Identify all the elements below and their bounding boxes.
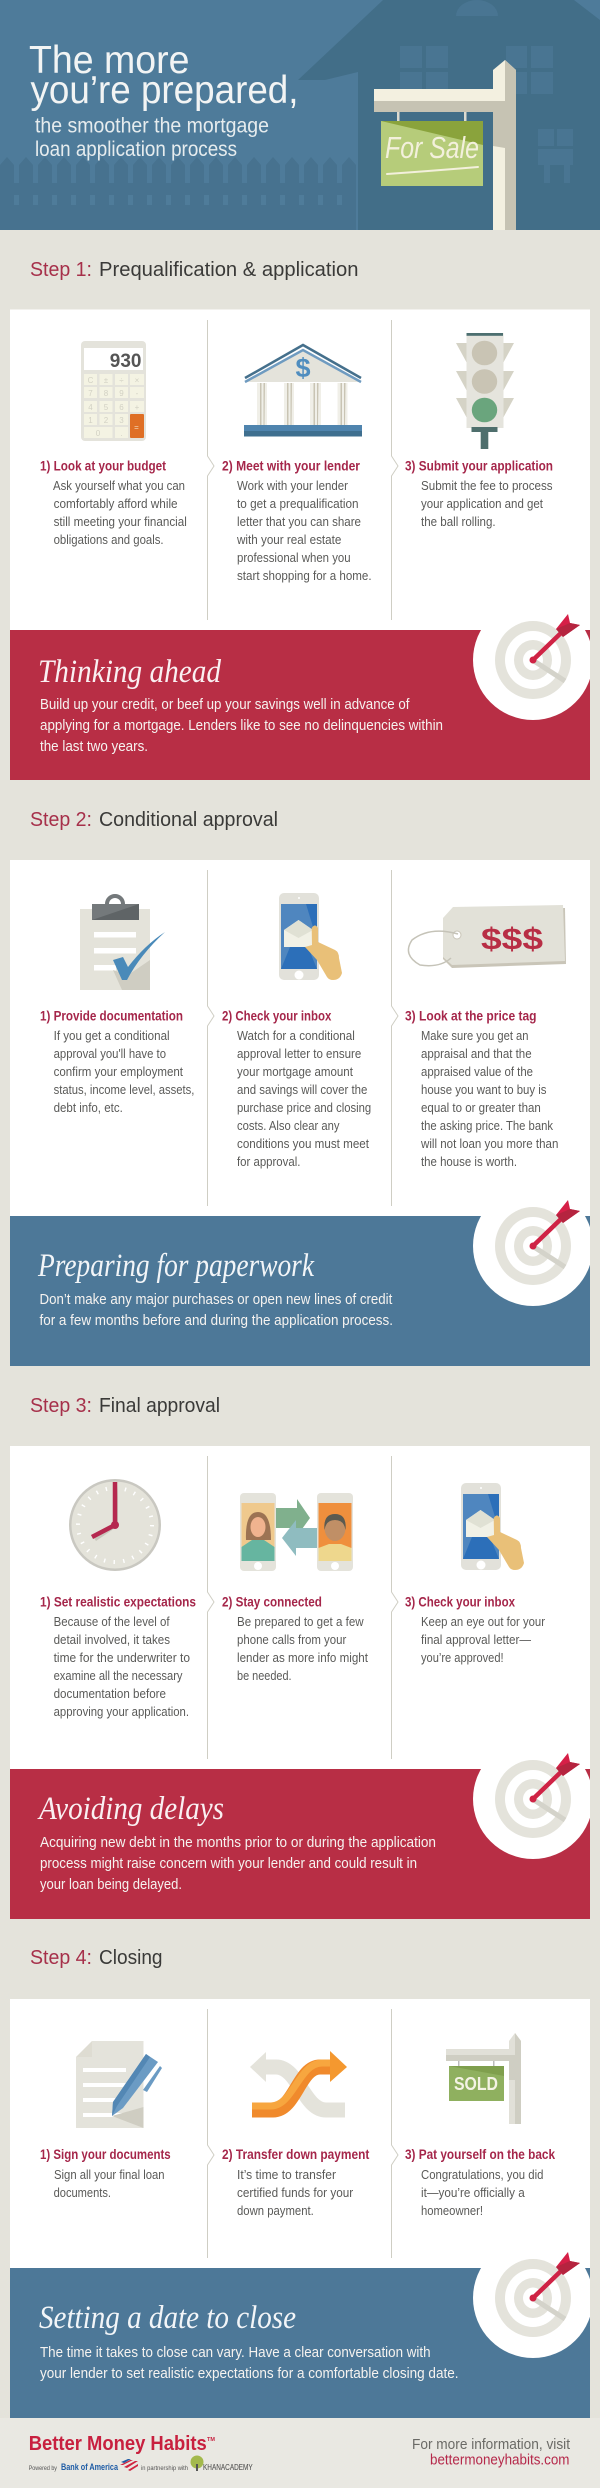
icon: price tag [408,905,566,968]
column 3: pat yourself on the back: 3) Pat yourself on the back [405,2147,555,2162]
column 2: transfer down payment: down payment. [237,2203,314,2218]
icon: phone with envelope [279,893,342,980]
icon: bank [244,345,362,436]
callout text: the last two years. [40,739,148,755]
icon: calculator [81,341,146,441]
callout heading: Preparing for paperwork [37,1248,315,1284]
column 3: submit your application: Submit the fee to process [421,478,553,493]
column 1: sign your documents [40,2147,171,2200]
icon: calculator: C [88,376,94,385]
sponsor logos: in partnership with [141,2465,188,2472]
heading: step 4: Closing [99,1947,162,1969]
icon: clock [69,1479,161,1571]
column 3: check your inbox: you’re approved! [421,1650,504,1665]
column 2: check your inbox: your mortgage amount [237,1064,353,1079]
callout text: your loan being delayed. [40,1877,182,1893]
column 3: pat yourself on the back: Congratulations, you did [421,2167,543,2182]
column 2: stay connected: be needed. [237,1668,292,1683]
column 2: stay connected [222,1594,368,1683]
column 3: pat yourself on the back: it—you’re officially a [421,2185,525,2200]
icon: calculator: 6 [119,403,124,412]
icon: calculator: 4 [88,403,93,412]
icon: calculator: ÷ [119,376,124,385]
column 2: check your inbox [222,1008,371,1169]
column 1: provide documentation: confirm your employment [54,1064,183,1079]
callout: setting a date to close [10,2238,593,2418]
column 1: provide documentation: status, income level, assets, [54,1082,194,1097]
column 3: look at the price tag: will not loan you more than [420,1136,558,1151]
column 2: transfer down payment: 2) Transfer down payment [222,2147,370,2162]
column 2: transfer down payment: certified funds for your [237,2185,354,2200]
panel: step 1 [10,310,590,630]
column 1: look at your budget [40,458,187,547]
column 1: sign your documents: Sign all your final loan [54,2167,165,2182]
column 2: transfer down payment [222,2147,370,2218]
column 3: check your inbox: Keep an eye out for your [421,1614,546,1629]
column 1: set realistic expectations [40,1594,196,1719]
title [29,39,298,112]
column 1: look at your budget: Ask yourself what you can [53,478,185,493]
column 3: check your inbox: final approval letter— [421,1632,531,1647]
icon: sold sign: SOLD [454,2074,498,2094]
column 1: set realistic expectations: 1) Set realistic expectations [40,1594,196,1610]
logo: better money habits: TM [207,2437,215,2443]
subtitle [35,114,269,161]
panel: step 2 [10,860,590,1216]
heading: step 2: Step 2: [30,809,92,831]
column 2: transfer down payment: It’s time to transfer [237,2167,337,2182]
icon: target [473,1186,593,1306]
callout text: The time it takes to close can vary. Have a clear conversation with [40,2345,430,2361]
column 2: meet with your lender: professional when you [237,550,351,565]
callout text [40,2345,458,2382]
column 3: look at the price tag: 3) Look at the price tag [405,1008,536,1024]
more information link: bettermoneyhabits.com [430,2452,570,2468]
panel: step 3 [10,1446,590,1769]
column 1: set realistic expectations: detail involved, it takes [54,1632,170,1647]
column 1: set realistic expectations: approving your application. [54,1704,189,1719]
callout text: applying for a mortgage. Lenders like to see no delinquencies within [40,718,443,734]
icon: calculator: ± [104,376,109,385]
icon: traffic light [456,333,514,449]
column 1: set realistic expectations: Because of the level of [54,1614,170,1629]
icon: calculator: + [135,403,140,412]
callout text: Don’t make any major purchases or open new lines of credit [40,1292,392,1308]
icon: target [473,2238,593,2358]
icon: for sale sign: For Sale [385,130,479,165]
icon: target [473,600,593,720]
callout text: Build up your credit, or beef up your savings well in advance of [40,697,410,713]
icon: document with pen [76,2041,162,2128]
callout text: your lender to set realistic expectations for a comfortable closing date. [40,2366,458,2382]
column 3: pat yourself on the back: homeowner! [421,2203,483,2218]
icon: clipboard with check [80,896,165,990]
sponsor logos: Bank of America [61,2462,119,2473]
column 2: stay connected: 2) Stay connected [222,1594,322,1610]
heading: step 4 [30,1947,162,1969]
icon: calculator: 5 [104,403,109,412]
title: The more [29,39,190,82]
column 1: look at your budget: 1) Look at your budget [40,458,166,474]
column 3: submit your application: the ball rolling. [421,514,496,529]
column 1: set realistic expectations: examine all the necessary [54,1668,183,1683]
icon: calculator: 0 [96,429,101,438]
column 2: stay connected: phone calls from your [237,1632,347,1647]
column 3: look at the price tag: the asking price. The bank [421,1118,553,1133]
footer [0,2418,600,2488]
column 3: look at the price tag: Make sure you get an [421,1028,528,1043]
column 2: meet with your lender: with your real estate [236,532,341,547]
column 2: check your inbox: and savings will cover the [237,1082,367,1097]
icon: calculator: 7 [88,389,93,398]
callout heading: Thinking ahead [38,654,221,690]
icon: calculator: 2 [104,416,109,425]
column 2: check your inbox: approval letter to ensure [237,1046,361,1061]
column 2: check your inbox: costs. Also clear any [237,1118,340,1133]
callout text [40,1292,393,1329]
column 3: look at the price tag [405,1008,558,1169]
column 1: set realistic expectations: time for the underwriter to [54,1650,190,1665]
heading: step 4: Step 4: [30,1947,92,1969]
column 2: stay connected: lender as more info might [237,1650,368,1665]
column 1: provide documentation: 1) Provide documentation [40,1008,183,1024]
panel: step 4 [10,1999,590,2268]
illustration: picket fence [0,157,356,230]
icon: sold sign [446,2033,521,2124]
icon: calculator: 9 [119,389,124,398]
column 2: check your inbox: 2) Check your inbox [222,1008,332,1024]
column 2: check your inbox: Watch for a conditional [237,1028,355,1043]
column 3: look at the price tag: equal to or greater than [421,1100,541,1115]
callout text: for a few months before and during the application process. [40,1313,393,1329]
column 3: check your inbox: 3) Check your inbox [405,1594,515,1610]
logo: better money habits: Better Money Habits [29,2433,207,2455]
column 3: look at the price tag: appraised value of the [421,1064,533,1079]
icon: crossing arrows [250,2051,347,2110]
sponsor logos: Powered by [29,2465,58,2472]
icon: phones with arrows [240,1493,353,1571]
icon: bank: $ [295,353,311,383]
column 3: look at the price tag: the house is worth. [421,1154,517,1169]
column 2: check your inbox: purchase price and closing [237,1100,371,1115]
icon: target [473,1739,593,1859]
callout text: process might raise concern with your lender and could result in [40,1856,417,1872]
subtitle: the smoother the mortgage [35,114,269,138]
heading: step 2: Conditional approval [99,809,278,831]
more information link: For more information, visit [412,2436,571,2453]
heading: step 1: Prequalification & application [99,259,358,281]
icon: calculator: 1 [88,416,93,425]
column 2: meet with your lender: to get a prequalification [237,496,359,511]
column 1: look at your budget: still meeting your financial [54,514,187,529]
subtitle: loan application process [35,138,237,161]
more information link [412,2436,571,2468]
sponsor logos: KHANACADEMY [203,2463,253,2472]
callout heading: Setting a date to close [39,2300,296,2336]
title: you’re prepared, [30,69,298,112]
icon: price tag: $$$ [481,921,543,956]
column 2: check your inbox: conditions you must meet [237,1136,369,1151]
icon: phone with envelope [461,1483,524,1570]
column 3: look at the price tag: house you want to buy is [421,1082,547,1097]
hero banner [0,0,600,230]
callout: thinking ahead [10,600,593,780]
callout: preparing for paperwork [10,1186,593,1366]
icon: calculator: = [134,423,139,432]
icon: for sale sign [374,60,516,230]
column 1: look at your budget: comfortably afford while [54,496,178,511]
column 1: sign your documents: documents. [54,2185,111,2200]
column 1: set realistic expectations: documentation before [54,1686,166,1701]
column 3: submit your application: 3) Submit your application [405,458,553,474]
column 1: provide documentation [40,1008,194,1115]
icon: calculator: 3 [119,416,124,425]
column 3: submit your application [405,458,553,529]
column 1: provide documentation: approval you'll have to [54,1046,166,1061]
column 2: stay connected: Be prepared to get a few [237,1614,364,1629]
callout: avoiding delays [10,1739,593,1919]
heading: step 3: Final approval [99,1395,220,1417]
column 2: meet with your lender: Work with your lender [237,478,349,493]
column 3: submit your application: your application and get [421,496,543,511]
icon: calculator: - [136,389,139,398]
callout text: Acquiring new debt in the months prior to or during the application [40,1835,436,1851]
column 3: pat yourself on the back [405,2147,555,2218]
icon: calculator: . [120,429,123,438]
column 1: look at your budget: obligations and goals. [54,532,164,547]
heading: step 3 [30,1395,220,1417]
column 1: provide documentation: debt info, etc. [54,1100,123,1115]
column 1: sign your documents: 1) Sign your documents [40,2147,171,2162]
column 1: provide documentation: If you get a conditional [54,1028,170,1043]
column 2: meet with your lender: 2) Meet with your lender [222,458,361,474]
column 3: look at the price tag: appraisal and that the [421,1046,532,1061]
heading: step 3: Step 3: [30,1395,92,1417]
column 2: check your inbox: for approval. [237,1154,300,1169]
icon: calculator: 8 [104,389,109,398]
column 2: meet with your lender: letter that you can share [237,514,361,529]
column 2: meet with your lender [222,458,372,583]
callout text [40,697,443,755]
callout text [40,1835,436,1893]
callout heading: Avoiding delays [37,1791,224,1827]
heading: step 1: Step 1: [30,259,92,281]
icon: calculator: × [135,376,140,385]
column 3: check your inbox [405,1594,546,1665]
illustration: house silhouette [298,0,600,230]
column 2: meet with your lender: start shopping for a home. [237,568,372,583]
sponsor logos [29,2456,253,2473]
icon: calculator: 930 [110,351,142,372]
